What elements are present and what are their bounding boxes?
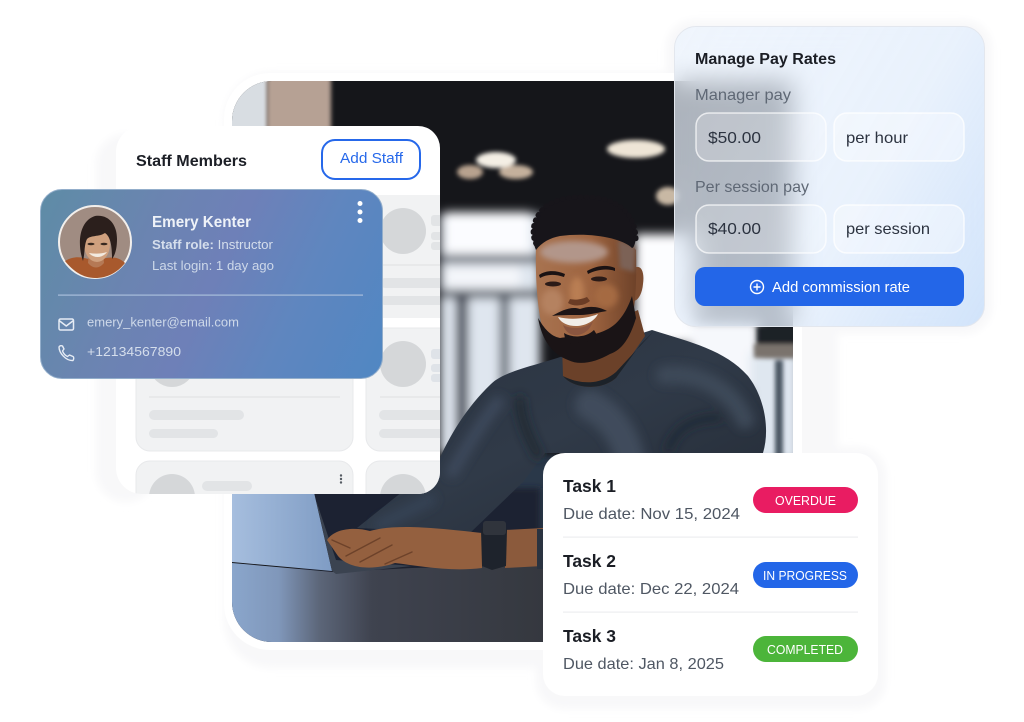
input: manager pay unit <box>834 113 964 161</box>
task 3: COMPLETED <box>767 642 843 657</box>
icon: email <box>59 319 74 330</box>
label: per session pay: Per session pay <box>695 179 809 196</box>
input: manager pay amount <box>696 113 826 161</box>
panel: tasks <box>543 453 878 696</box>
heading: staff members: Staff Members <box>136 153 247 170</box>
input: session pay amount <box>696 205 826 253</box>
neck <box>562 310 645 387</box>
input: manager pay amount: $50.00 <box>708 130 761 147</box>
beard <box>538 296 636 363</box>
task 2: Task 2 <box>563 551 616 571</box>
trainer shirt <box>357 330 766 533</box>
panel: manage pay rates <box>674 26 985 327</box>
heading: manage pay rates: Manage Pay Rates <box>695 51 836 68</box>
task 2 <box>563 551 858 598</box>
smile <box>558 314 598 326</box>
email address: emery_kenter@email.com <box>87 314 239 330</box>
head <box>533 197 643 363</box>
menu dots <box>358 201 362 223</box>
forearm, hand and watch <box>327 521 543 570</box>
task 3: Due date: Jan 8, 2025 <box>563 656 724 673</box>
button: add commission rate: Add commission rate <box>772 280 910 296</box>
brows and eyes <box>539 271 565 278</box>
staff role: Staff role: Instructor <box>152 237 274 252</box>
avatar <box>59 206 131 278</box>
button: add commission rate <box>695 267 964 306</box>
task 1: OVERDUE <box>775 493 836 508</box>
task 3: Task 3 <box>563 626 616 646</box>
task 1: Task 1 <box>563 476 616 496</box>
panel: staff profile card <box>40 189 383 379</box>
input: session pay amount: $40.00 <box>708 221 761 238</box>
button: add staff: Add Staff <box>340 150 404 167</box>
task 1 <box>563 476 858 523</box>
laptop <box>232 488 412 574</box>
task 1: Due date: Nov 15, 2024 <box>563 506 740 523</box>
phone number: +12134567890 <box>87 344 181 359</box>
gym background <box>226 76 800 642</box>
input: session pay unit <box>834 205 964 253</box>
label: manager pay: Manager pay <box>695 87 791 104</box>
last login: Last login: 1 day ago <box>152 258 274 273</box>
staff name: Emery Kenter <box>152 214 251 231</box>
photo: smiling trainer at laptop in gym <box>232 66 806 642</box>
input: manager pay unit: per hour <box>846 130 909 147</box>
panel: staff members <box>116 126 440 494</box>
icon: phone <box>59 346 74 361</box>
input: session pay unit: per session <box>846 221 930 238</box>
hair <box>532 210 636 250</box>
table <box>232 563 543 642</box>
task 2: Due date: Dec 22, 2024 <box>563 581 739 598</box>
staff list placeholder cards <box>116 195 466 521</box>
button: add staff <box>322 140 420 179</box>
task 3 <box>563 626 858 673</box>
task 2: IN PROGRESS <box>763 568 847 583</box>
